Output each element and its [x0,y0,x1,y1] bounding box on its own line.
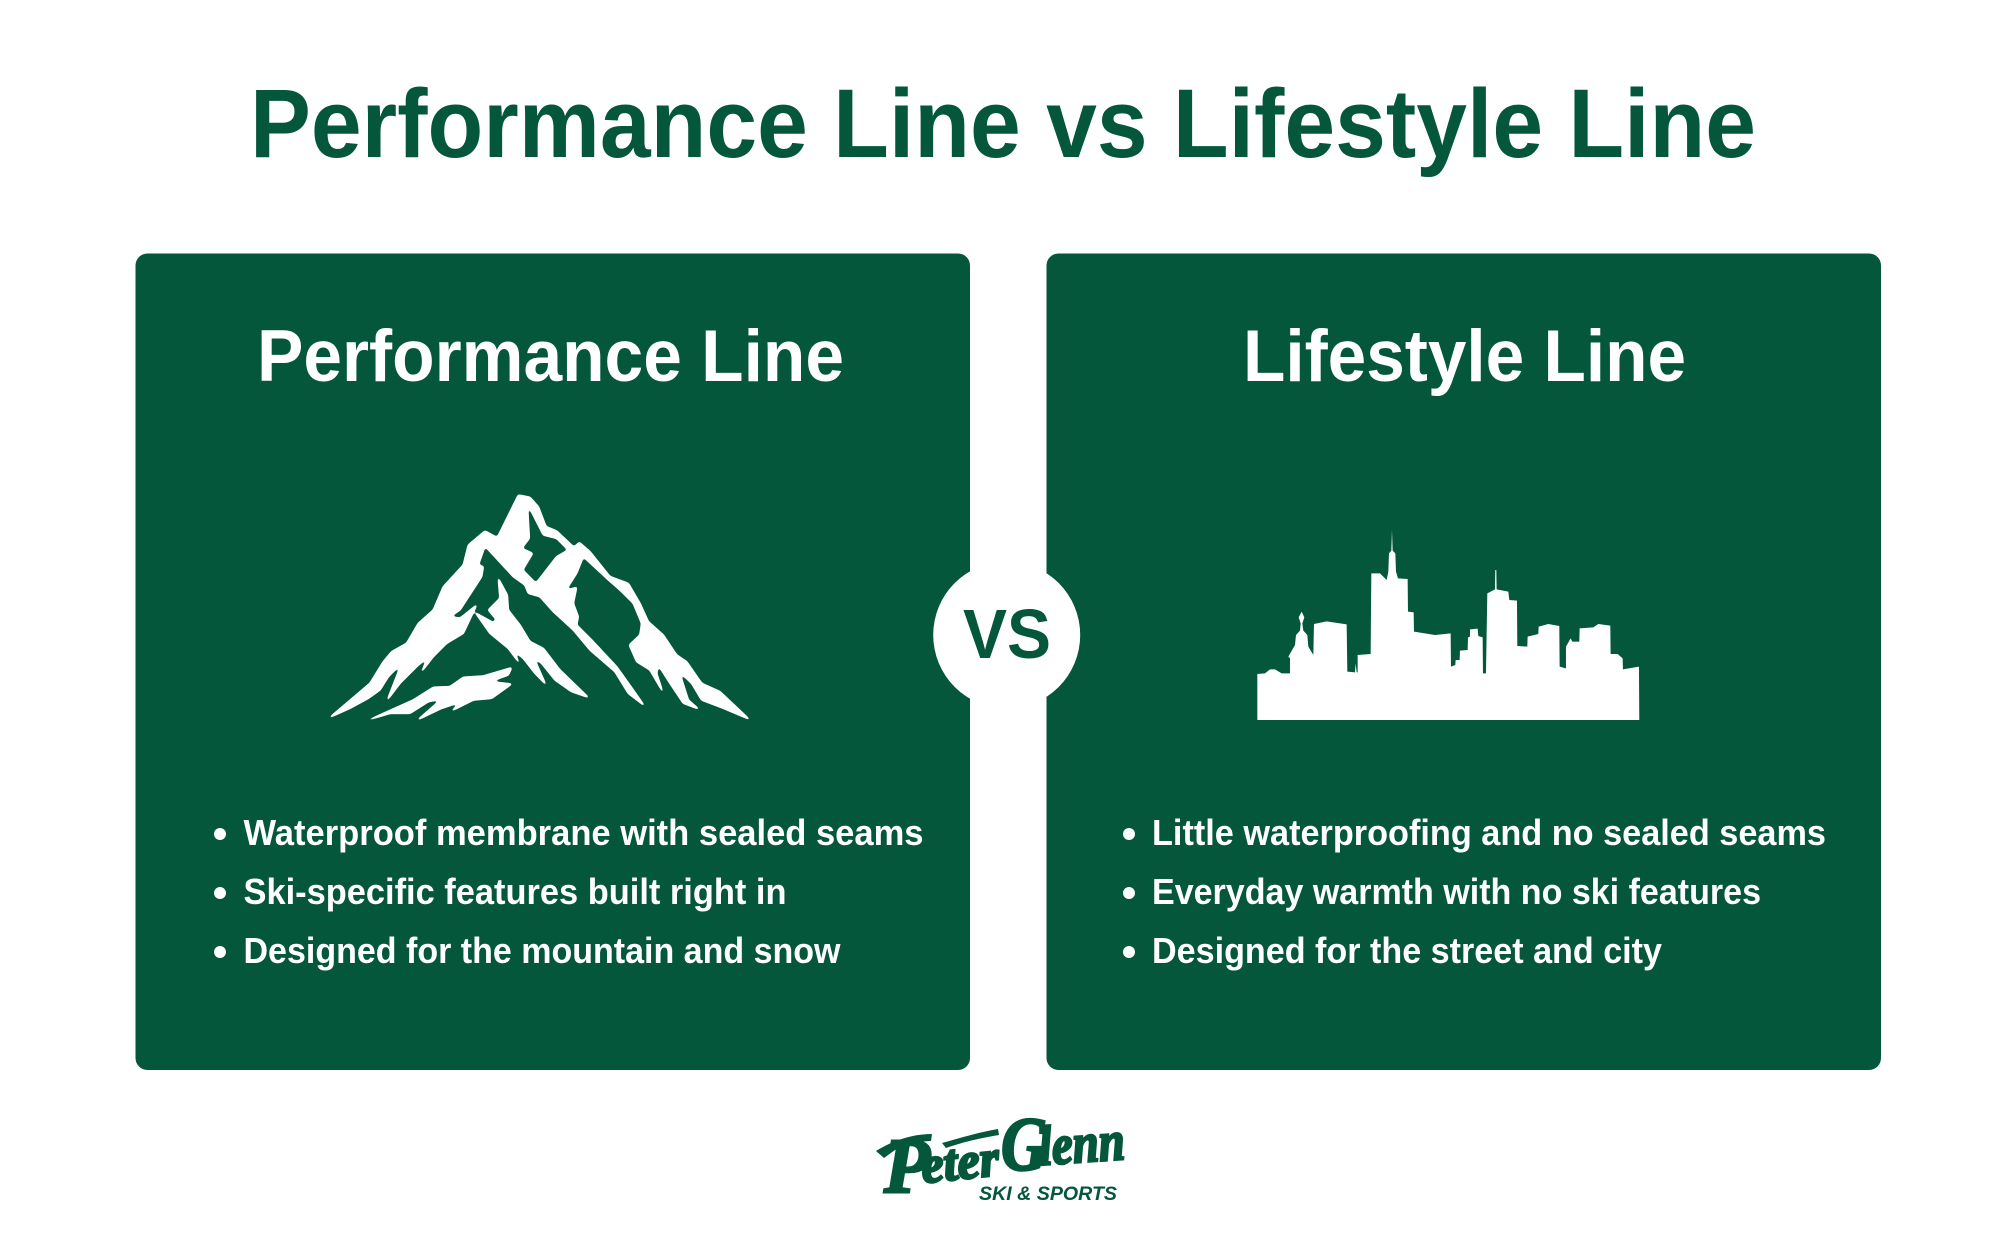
bullet list: lifestyle line: Designed for the street and city [1152,930,1663,971]
logo wordmark: lenn [1037,1110,1127,1178]
logo wordmark [883,1103,1127,1209]
bullet list: lifestyle line [1123,812,1826,971]
title: Performance Line vs Lifestyle Line [250,69,1756,178]
logo wordmark: P [883,1122,931,1209]
bullet list: lifestyle line: Little waterproofing and no sealed seams [1152,812,1826,853]
bullet list: performance line [214,812,924,971]
logo: Peter Glenn Ski & Sports [876,1103,1127,1209]
bullet list: lifestyle line: Everyday warmth with no ski features [1152,871,1761,912]
panel: lifestyle line [1046,254,1881,1070]
bullet list: performance line: Waterproof membrane with sealed seams [244,812,924,853]
vs badge [933,562,1080,708]
heading: performance line: Performance Line [257,314,844,397]
logo wordmark: eter [918,1130,1003,1195]
vs badge: VS [963,595,1051,673]
icon: mountain [330,495,749,720]
heading: lifestyle line: Lifestyle Line [1243,314,1686,397]
logo wordmark: G [1001,1103,1047,1187]
bullet list: performance line: Ski-specific features built right in [244,871,786,912]
icon: city skyline [1257,530,1639,720]
panel: performance line [136,254,970,1070]
bullet list: performance line: Designed for the mountain and snow [244,930,841,971]
logo swash [876,1129,999,1158]
logo tagline: SKI & SPORTS [979,1184,1117,1205]
